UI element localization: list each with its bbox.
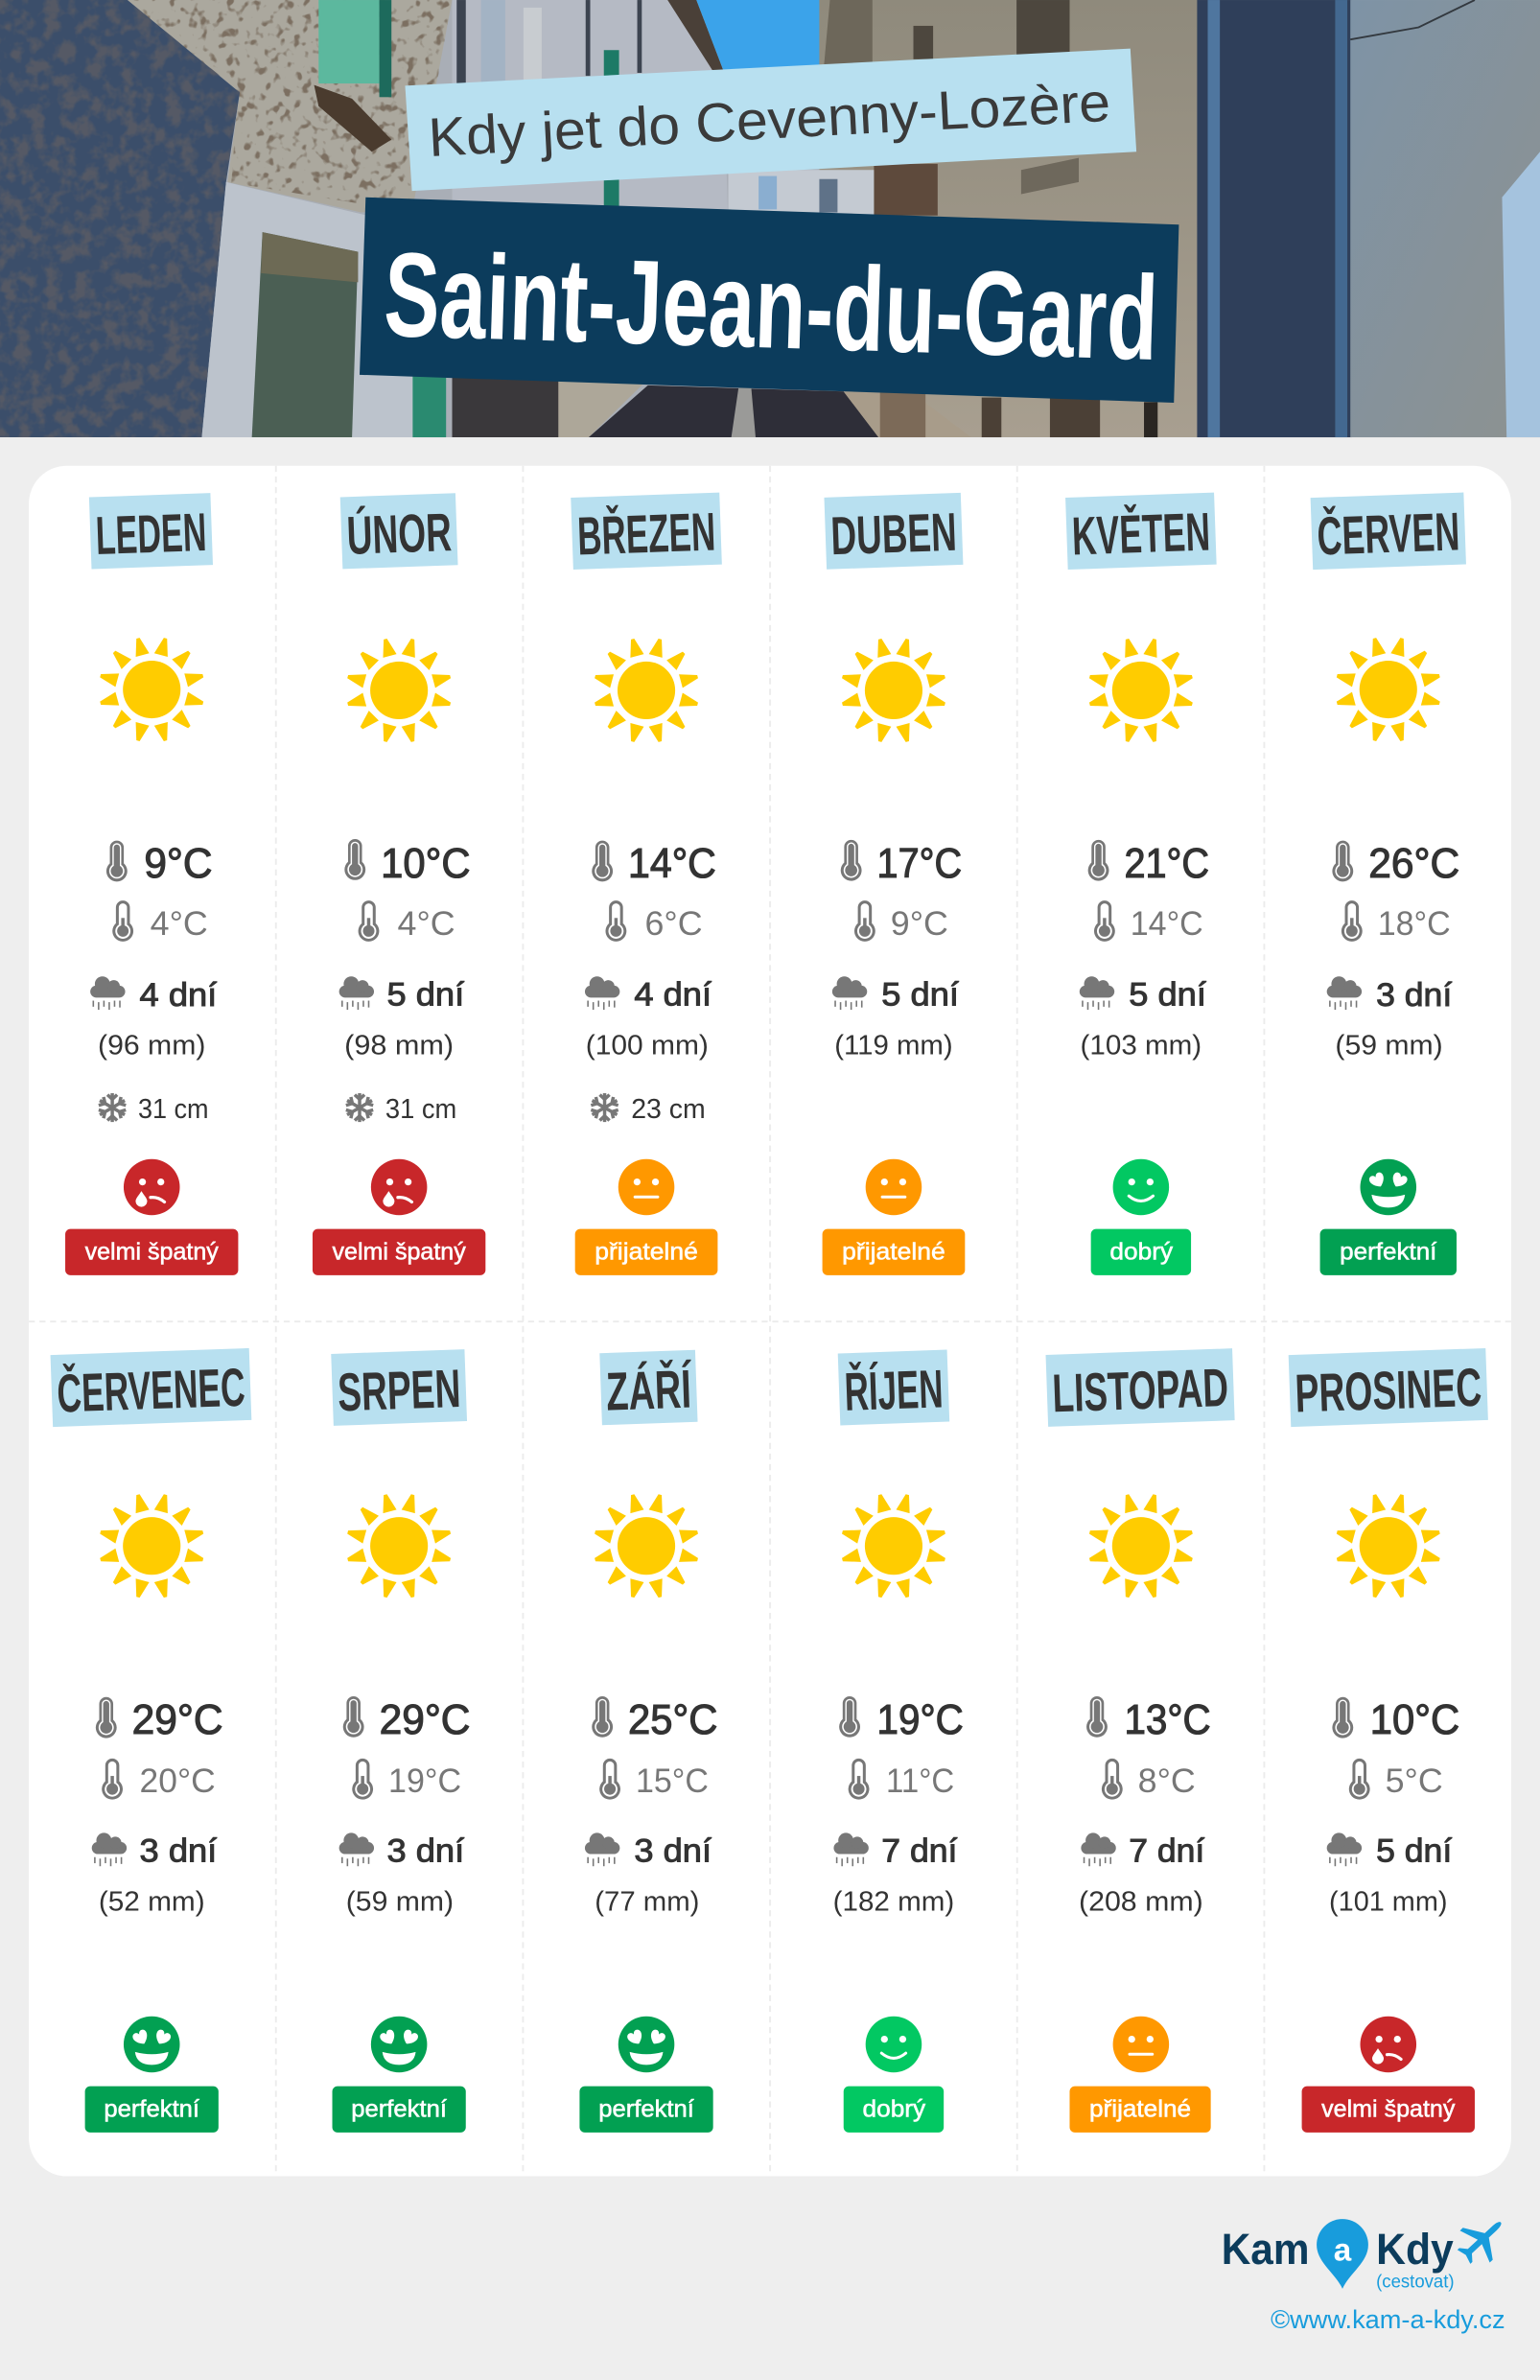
icon: sun [346, 638, 453, 743]
rating pill: perfektní [1340, 1239, 1437, 1265]
month label [571, 493, 722, 570]
icon: rain [1080, 976, 1114, 1010]
rating pill [844, 2087, 944, 2133]
icon: acceptable [618, 1159, 674, 1215]
icon: low temperature [605, 900, 626, 942]
low temperature: 6°C [644, 905, 703, 943]
panel: ZÁŘÍ [579, 1350, 717, 2133]
website url: ©www.kam-a-kdy.cz [1271, 2305, 1505, 2334]
high temperature: 25°C [628, 1697, 717, 1743]
icon: sun [346, 1493, 453, 1599]
precipitation: (100 mm) [586, 1030, 709, 1061]
logo: Kam a Kdy: Kam [1222, 2225, 1309, 2274]
high temperature: 17°C [877, 841, 962, 887]
icon: sun [1335, 1493, 1441, 1599]
icon: low temperature [102, 1759, 123, 1800]
month label: ČERVENEC [56, 1357, 246, 1424]
panel: BŘEZEN [571, 493, 722, 1275]
rating pill: perfektní [598, 2096, 694, 2122]
icon: low temperature [854, 900, 875, 942]
icon: rain [1081, 1832, 1116, 1866]
icon: very bad [124, 1159, 179, 1215]
rating pill [85, 2087, 219, 2133]
month label: SRPEN [337, 1358, 461, 1422]
icon: high temperature [839, 1696, 860, 1738]
icon: sun [841, 1493, 946, 1599]
second row of months [51, 1348, 1488, 2133]
icon: low temperature [352, 1759, 373, 1800]
panel: LISTOPAD [1046, 1348, 1235, 2133]
month label [824, 493, 963, 570]
rating pill [1091, 1229, 1191, 1275]
panel: LEDEN [65, 493, 238, 1275]
icon: rain [1327, 976, 1362, 1010]
rating pill [579, 2087, 713, 2133]
icon: perfect [618, 2017, 674, 2072]
rating pill [1320, 1229, 1457, 1275]
icon: high temperature [841, 840, 862, 881]
panel: ŘÍJEN [833, 1350, 964, 2133]
rainy days: 7 dní [1129, 1832, 1205, 1869]
icon: high temperature [1332, 1697, 1353, 1738]
precipitation: (101 mm) [1329, 1887, 1447, 1918]
month label: KVĚTEN [1071, 501, 1211, 566]
icon: snow [98, 1093, 128, 1122]
month label: ČERVEN [1316, 501, 1460, 567]
precipitation: (98 mm) [344, 1030, 454, 1061]
panel: ČERVENEC [51, 1348, 251, 2133]
low temperature: 20°C [140, 1762, 216, 1800]
icon: very bad [1361, 2017, 1416, 2072]
icon: low temperature [599, 1759, 620, 1800]
icon: high temperature [1332, 841, 1353, 881]
panel: DUBEN [823, 493, 965, 1275]
rating pill [823, 1229, 965, 1275]
month label: ŘÍJEN [844, 1358, 945, 1422]
icon: snow [590, 1093, 619, 1122]
icon: high temperature [344, 839, 365, 880]
month label [1311, 493, 1466, 570]
icon: perfect [124, 2017, 179, 2072]
icon: airplane [1449, 2206, 1516, 2273]
icon: snow [344, 1093, 375, 1122]
precipitation: (182 mm) [833, 1887, 954, 1918]
high temperature: 29°C [380, 1697, 471, 1743]
month label: DUBEN [829, 502, 958, 566]
high temperature: 14°C [628, 841, 716, 887]
icon: low temperature [112, 900, 133, 942]
precipitation: (52 mm) [99, 1887, 205, 1918]
high temperature: 9°C [144, 841, 213, 887]
icon: high temperature [106, 841, 128, 881]
rainy days: 5 dní [1129, 976, 1206, 1013]
first row of months [65, 493, 1466, 1275]
high temperature: 19°C [877, 1697, 964, 1743]
snow depth: 23 cm [631, 1094, 706, 1125]
high temperature: 26°C [1368, 841, 1459, 887]
rating pill [1069, 2087, 1211, 2133]
month label [599, 1350, 698, 1425]
low temperature: 18°C [1378, 905, 1451, 943]
icon: sun [99, 637, 205, 742]
high temperature: 13°C [1124, 1697, 1211, 1743]
icon: high temperature [96, 1697, 117, 1738]
panel: SRPEN [331, 1349, 471, 2133]
panel: ČERVEN [1311, 493, 1466, 1275]
subtitle text: Kdy jet do Cevenny-Lozère [427, 72, 1112, 169]
rainy days: 3 dní [634, 1832, 712, 1869]
high temperature: 29°C [132, 1697, 223, 1743]
icon: rain [585, 1832, 619, 1866]
rating pill: velmi špatný [333, 1239, 467, 1265]
month label: ÚNOR [346, 502, 453, 566]
icon: rain [832, 976, 867, 1010]
header photo: narrow street in Saint-Jean-du-Gard [0, 0, 1540, 437]
rating pill: přijatelné [842, 1239, 945, 1265]
title text: Saint-Jean-du-Gard [383, 228, 1160, 385]
month label [331, 1349, 467, 1426]
icon: rain [92, 1832, 127, 1866]
icon: sun [594, 638, 699, 743]
month label: LISTOPAD [1051, 1357, 1229, 1423]
precipitation: (59 mm) [346, 1887, 454, 1918]
rainy days: 5 dní [386, 976, 465, 1013]
month label: BŘEZEN [576, 501, 716, 566]
icon: sun [841, 638, 946, 743]
icon: acceptable [1113, 2017, 1169, 2072]
precipitation: (119 mm) [834, 1030, 953, 1061]
panel: PROSINEC [1289, 1348, 1488, 2133]
month label [89, 493, 213, 570]
icon: perfect [1361, 1159, 1416, 1215]
icon: high temperature [592, 841, 613, 881]
precipitation: (59 mm) [1335, 1030, 1443, 1061]
low temperature: 5°C [1386, 1762, 1443, 1800]
rainy days: 3 dní [140, 1832, 218, 1869]
high temperature: 10°C [1370, 1697, 1459, 1743]
icon: rain [833, 1832, 869, 1866]
snow depth: 31 cm [385, 1094, 456, 1125]
month label: ZÁŘÍ [605, 1359, 693, 1422]
precipitation: (77 mm) [595, 1887, 699, 1918]
low temperature: 14°C [1131, 905, 1203, 943]
title banner [360, 198, 1178, 403]
rating pill: dobrý [1109, 1239, 1174, 1265]
icon: rain [339, 976, 374, 1010]
rainy days: 5 dní [881, 976, 960, 1013]
icon: low temperature [849, 1759, 869, 1800]
rating pill: přijatelné [1089, 2096, 1191, 2122]
rating pill [313, 1229, 485, 1275]
precipitation: (96 mm) [98, 1030, 205, 1061]
panel: KVĚTEN [1065, 493, 1217, 1275]
low temperature: 8°C [1138, 1762, 1196, 1800]
month label [1065, 493, 1217, 570]
icon: sun [1087, 1493, 1194, 1599]
logo: Kam a Kdy: Kdy [1376, 2225, 1454, 2274]
icon: low temperature [1094, 900, 1115, 942]
panel: months card [29, 466, 1511, 2176]
month label [1046, 1348, 1235, 1427]
snow depth: 31 cm [138, 1094, 209, 1125]
icon: high temperature [343, 1696, 364, 1738]
rating pill [65, 1229, 238, 1275]
low temperature: 15°C [636, 1762, 709, 1800]
high temperature: 10°C [381, 841, 471, 887]
icon: map pin [1317, 2219, 1368, 2289]
icon: very bad [371, 1159, 427, 1215]
icon: low temperature [1102, 1759, 1123, 1800]
low temperature: 19°C [388, 1762, 461, 1800]
rainy days: 4 dní [634, 976, 712, 1013]
logo: Kam a Kdy [1222, 2206, 1516, 2292]
icon: low temperature [1349, 1759, 1370, 1800]
icon: sun [594, 1493, 699, 1599]
rainy days: 3 dní [386, 1832, 465, 1869]
rating pill: velmi špatný [85, 1239, 220, 1265]
rating pill: perfektní [351, 2096, 447, 2122]
subtitle banner [405, 49, 1136, 191]
rating pill [575, 1229, 717, 1275]
icon: high temperature [592, 1696, 613, 1738]
rating pill: perfektní [104, 2096, 199, 2122]
high temperature: 21°C [1124, 841, 1209, 887]
icon: rain [90, 976, 126, 1010]
month label: LEDEN [95, 502, 207, 566]
rainy days: 3 dní [1376, 977, 1453, 1014]
rating pill: dobrý [863, 2096, 926, 2122]
icon: good [866, 2017, 922, 2072]
icon: sun [1335, 637, 1441, 742]
card grid [29, 466, 1511, 2176]
month label [340, 493, 458, 569]
icon: rain [1327, 1832, 1362, 1866]
icon: sun [1087, 638, 1194, 743]
low temperature: 4°C [398, 905, 455, 943]
icon: acceptable [866, 1159, 922, 1215]
low temperature: 9°C [891, 905, 948, 943]
rating pill [1302, 2087, 1475, 2133]
icon: perfect [371, 2017, 427, 2072]
icon: rain [339, 1832, 374, 1866]
icon: good [1113, 1159, 1169, 1215]
icon: high temperature [1086, 1696, 1108, 1738]
panel: ÚNOR [313, 493, 485, 1275]
low temperature: 4°C [151, 905, 208, 943]
icon: sun [99, 1493, 205, 1599]
precipitation: (103 mm) [1081, 1030, 1202, 1061]
rating pill: přijatelné [595, 1239, 698, 1265]
icon: low temperature [1342, 900, 1363, 942]
icon: map pin: a [1334, 2233, 1352, 2269]
rating pill: velmi špatný [1321, 2096, 1456, 2122]
month label [51, 1348, 251, 1427]
rainy days: 4 dní [140, 977, 218, 1014]
icon: low temperature [359, 900, 379, 942]
logo: Kam a Kdy: (cestovat) [1376, 2271, 1455, 2292]
precipitation: (208 mm) [1079, 1887, 1203, 1918]
rainy days: 5 dní [1376, 1832, 1453, 1869]
icon: high temperature [1088, 840, 1108, 881]
icon: rain [585, 976, 619, 1010]
rating pill [333, 2087, 466, 2133]
rainy days: 7 dní [881, 1832, 958, 1869]
month label [838, 1350, 949, 1425]
low temperature: 11°C [886, 1762, 954, 1800]
